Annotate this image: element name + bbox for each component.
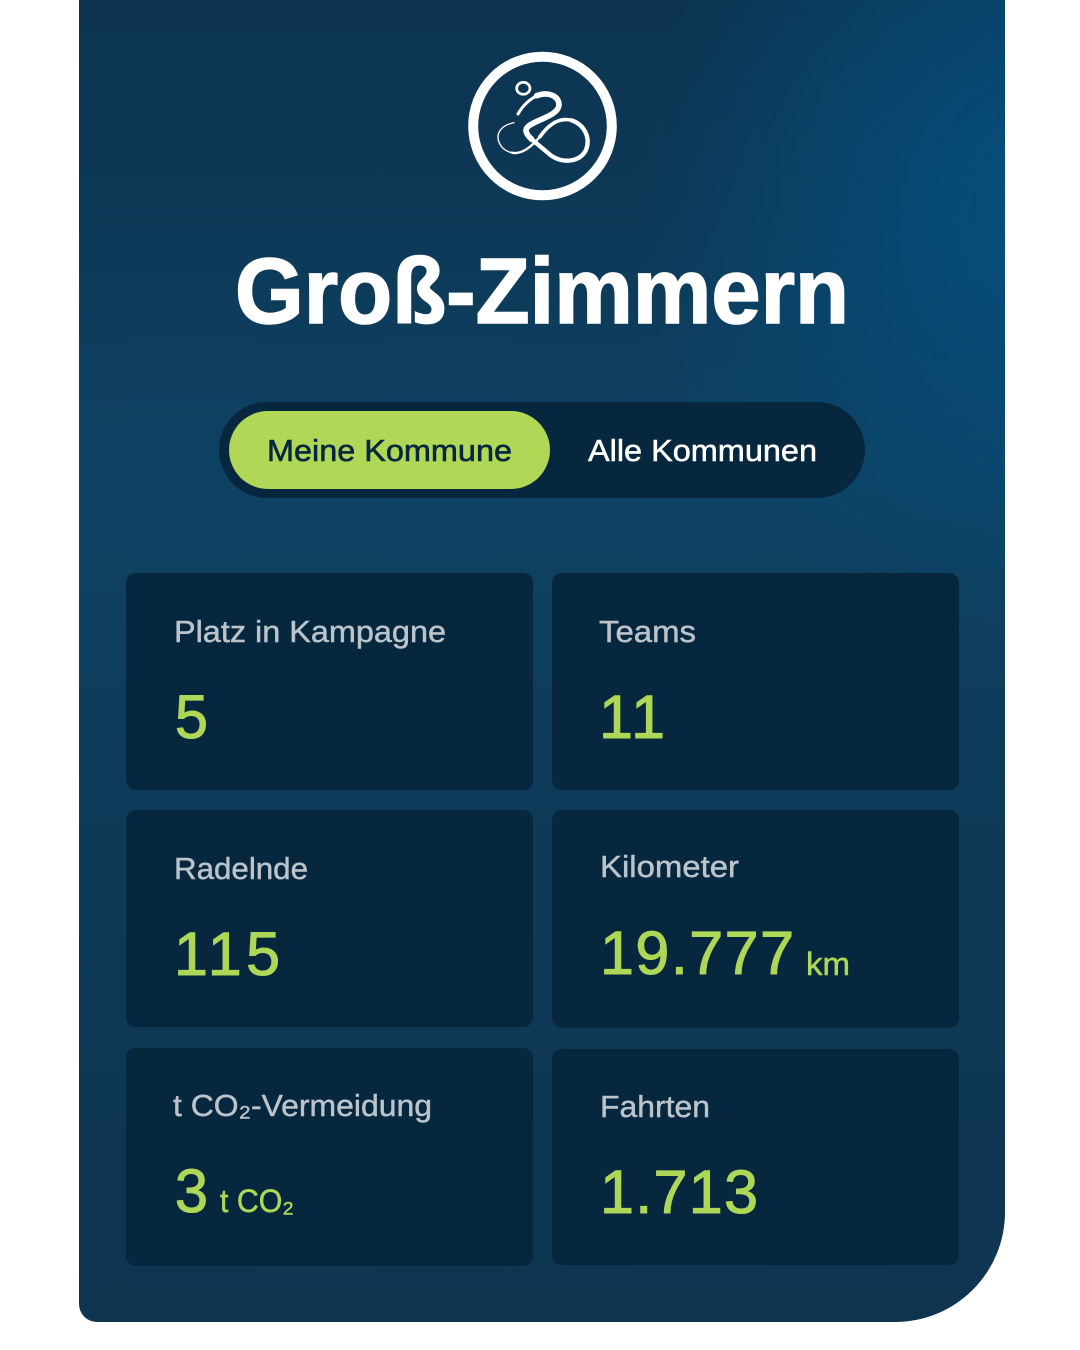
stat card: Teams: 11 (599, 683, 665, 751)
title: Groß-Zimmern (235, 239, 849, 343)
toggle (219, 402, 865, 498)
inactive option: Alle Kommunen: Alle Kommunen (588, 433, 817, 468)
icon: cyclist logo (473, 57, 612, 195)
active pill: Meine Kommune (229, 411, 550, 489)
stat card: Fahrten: Fahrten (600, 1089, 710, 1124)
active pill: Meine Kommune: Meine Kommune (267, 433, 512, 468)
stat card: Fahrten (552, 1049, 959, 1265)
stat card: Radelnde: 115 (174, 920, 280, 988)
stat card: Teams: Teams (599, 614, 696, 649)
stat card: Kilometer: km (806, 946, 850, 982)
stat card: t CO2-Vermeidung: t CO₂ (220, 1183, 294, 1219)
stat card: Platz in Kampagne: Platz in Kampagne (174, 614, 446, 649)
stat card: Platz in Kampagne: 5 (175, 683, 208, 751)
stat card: Radelnde (126, 810, 533, 1027)
stat card: Kilometer: Kilometer (600, 849, 739, 884)
stat card: t CO2-Vermeidung: 3 (175, 1157, 208, 1225)
stat card: t CO2-Vermeidung: t CO₂-Vermeidung (173, 1088, 432, 1123)
stat card: Fahrten: 1.713 (600, 1158, 758, 1226)
stat card: Radelnde: Radelnde (174, 851, 308, 886)
stat card: Teams (552, 573, 959, 790)
stat card: Platz in Kampagne (126, 573, 533, 790)
stat card: Kilometer: 19.777 (600, 919, 794, 987)
toggle track (219, 402, 865, 498)
stat card: t CO2-Vermeidung (126, 1048, 533, 1266)
stat card: Kilometer (552, 810, 959, 1028)
